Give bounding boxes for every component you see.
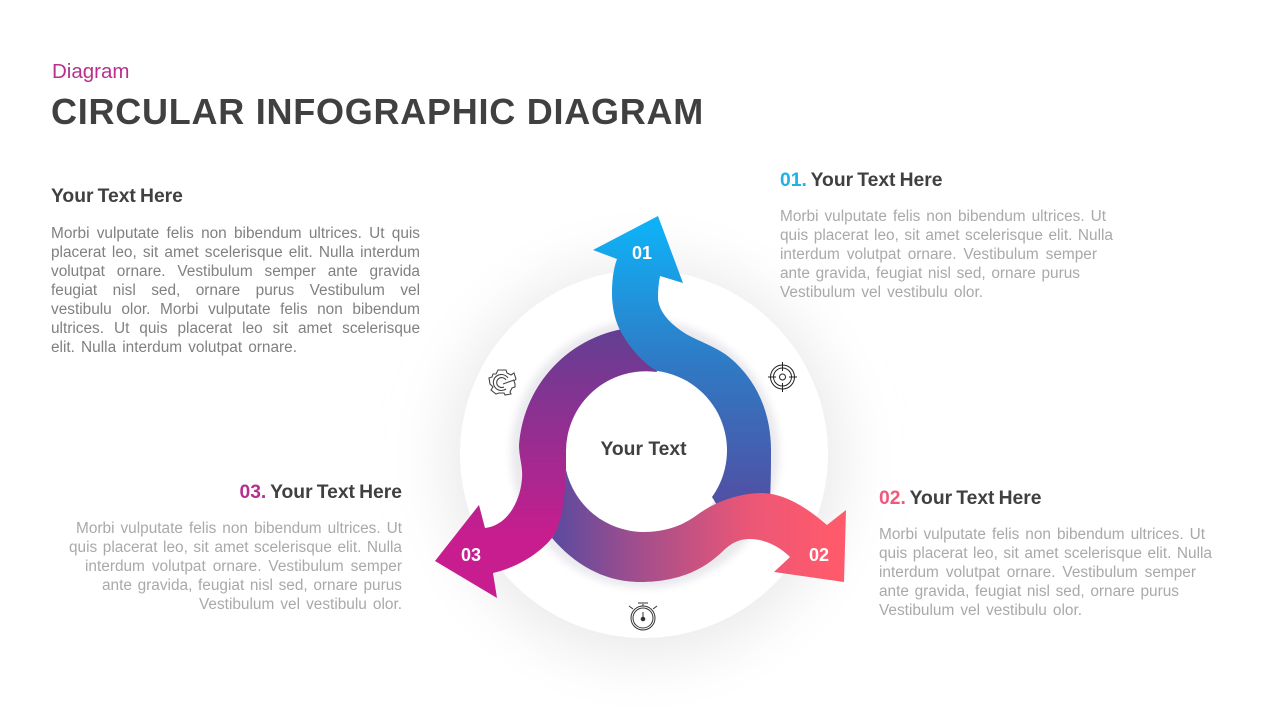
body 02: interdum volutpat ornare. Vestibulum semper [879, 564, 1196, 581]
body 03: ante gravida, feugiat nisl sed, ornare purus [102, 577, 402, 594]
intro body: ultrices. Ut quis placerat leo sit amet scelerisque [51, 320, 420, 337]
text block: 02 [879, 488, 1212, 619]
intro body: vestibulu olor. Morbi vulputate felis non bibendum [51, 301, 420, 318]
centre circle [562, 368, 730, 536]
intro body: placerat leo, sit amet scelerisque elit. Nulla interdum [51, 244, 420, 261]
intro heading: Your Text Here [51, 186, 183, 207]
heading 01: 01. Your Text Here [780, 170, 943, 191]
text block: 01 [780, 170, 1113, 301]
outer disc shadow [448, 264, 840, 656]
arrow 01 blue: 01 [632, 243, 652, 263]
arrow 01 blue [593, 216, 771, 510]
heading 03: 03. Your Text Here [239, 482, 402, 503]
heading 02: 02. Your Text Here [879, 488, 1042, 509]
body 01: quis placerat leo, sit amet scelerisque elit. Nulla [780, 227, 1113, 244]
body 02: Vestibulum vel vestibulu olor. [879, 602, 1082, 619]
text block: 03 [69, 482, 402, 613]
title: CIRCULAR INFOGRAPHIC DIAGRAM [51, 91, 704, 132]
icon: gear [489, 370, 516, 395]
intro body: elit. Nulla interdum volutpat ornare. [51, 339, 297, 356]
inner ring shadow [511, 320, 779, 588]
body 02 [879, 526, 1212, 619]
body 01: Morbi vulputate felis non bibendum ultrices. Ut [780, 208, 1106, 225]
body 01: interdum volutpat ornare. Vestibulum semper [780, 246, 1097, 263]
arrow 03 magenta: 03 [461, 545, 481, 565]
body 02: ante gravida, feugiat nisl sed, ornare purus [879, 583, 1179, 600]
arrow 02 coral: 02 [809, 545, 829, 565]
intro body: volutpat ornare. Vestibulum semper ante gravida [51, 263, 420, 280]
icon: stopwatch [629, 603, 657, 630]
text block: intro [51, 186, 420, 356]
icon: target [768, 362, 797, 392]
body 01: Vestibulum vel vestibulu olor. [780, 284, 983, 301]
outer white disc [460, 270, 828, 638]
intro body: feugiat nisl sed, ornare purus Vestibulum vel [51, 282, 420, 299]
body 02: Morbi vulputate felis non bibendum ultrices. Ut [879, 526, 1205, 543]
intro body [51, 225, 420, 356]
body 02: quis placerat leo, sit amet scelerisque elit. Nulla [879, 545, 1212, 562]
body 03: quis placerat leo, sit amet scelerisque elit. Nulla [69, 539, 402, 556]
body 03: Morbi vulputate felis non bibendum ultrices. Ut [76, 520, 402, 537]
intro body: Morbi vulputate felis non bibendum ultrices. Ut quis [51, 225, 420, 242]
arrow 02 coral [552, 470, 846, 582]
body 01: ante gravida, feugiat nisl sed, ornare purus [780, 265, 1080, 282]
subtitle: Diagram [52, 60, 129, 83]
body 03: interdum volutpat ornare. Vestibulum semper [85, 558, 402, 575]
body 01 [780, 208, 1113, 301]
body 03 [69, 520, 402, 613]
arrow 03 magenta [435, 327, 657, 598]
body 03: Vestibulum vel vestibulu olor. [199, 596, 402, 613]
centre label: Your Text [600, 439, 687, 460]
